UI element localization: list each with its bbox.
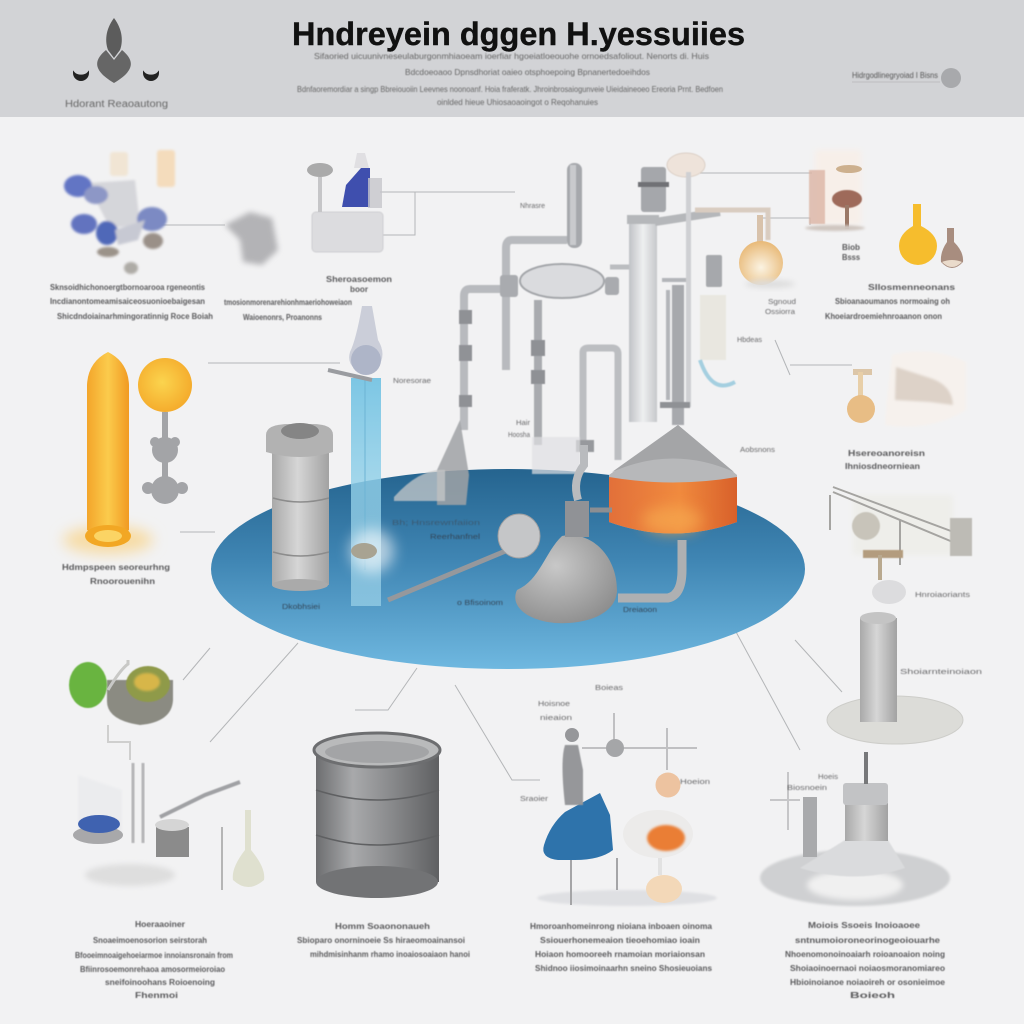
labels: Hoeis	[818, 774, 839, 781]
small diagram labels: Nhrasre	[520, 203, 545, 210]
grey rock sample	[225, 212, 278, 265]
labels	[787, 774, 839, 792]
caption: Fhenmoi	[135, 991, 178, 1000]
caption: sneifoinoohans Roioenoing	[105, 978, 215, 987]
panel: left yellow hydrogen tube	[62, 352, 192, 586]
caption: tmosionmorenarehionhmaeriohoweiaon	[224, 298, 352, 307]
panel: right conveyor machine	[830, 487, 972, 604]
panel: central process diagram	[211, 153, 805, 669]
caption: Bfooeimnoaigehoeiarmoe innoiansronain from	[75, 951, 233, 960]
caption: Shidnoo iiosimoinaarhn sneino Shosieuoians	[535, 964, 713, 973]
small amber flask	[941, 228, 963, 268]
grey spherical vessel	[388, 445, 682, 623]
caption	[297, 922, 470, 959]
caption: Bsss	[842, 253, 861, 262]
panel: right lower cylinder on plate	[827, 612, 982, 744]
small diagram labels: Hbdeas	[737, 337, 763, 344]
header description	[297, 51, 723, 107]
caption: Khoeiardroemiehnroaanon onon	[825, 312, 942, 321]
small diagram labels: Aobsnons	[740, 447, 776, 454]
caption	[785, 921, 946, 1000]
panel: top-right flasks	[739, 150, 963, 321]
caption: Nhoenomonoinoaiarh roioanoaion noing	[785, 950, 945, 959]
caption: Hbioinoianoe noiaoireh or osonieimoe	[790, 978, 946, 987]
small diagram labels: Hoosha	[508, 432, 530, 439]
connector lines	[160, 173, 852, 780]
valves	[142, 412, 188, 504]
caption: Sknsoidhichonoergtbornoarooa rgeneontis	[50, 283, 206, 292]
caption: Hoiaon homooreeh rnamoian moriaionsan	[535, 950, 705, 959]
header description: oinlded hieue Uhiosaoaoingot o Reqohanuies	[437, 97, 598, 107]
panel: grey storage barrel	[297, 733, 470, 959]
labels: nieaion	[540, 715, 572, 722]
right column tower	[627, 153, 768, 425]
small diagram labels	[393, 203, 796, 454]
pipework network	[394, 163, 640, 505]
panel: right flask and condenser: Hsereoanoreisn	[848, 449, 925, 458]
header badge: Hidrgodlinegryoiad I Bisns	[852, 71, 938, 80]
disc labels: Bh; Hnsrewnfaiion	[392, 520, 480, 527]
disc labels: o Bfisoinom	[457, 600, 503, 607]
small diagram labels: Hair	[516, 420, 531, 427]
caption	[50, 283, 213, 321]
caption: Boieoh	[850, 991, 895, 1000]
caption: mihdmisinhanm rhamo inoaiosoaiaon hanoi	[310, 950, 470, 959]
caption: Moiois Ssoeis Inoioaoee	[808, 921, 921, 930]
logo: leaf mark: Hdorant Reaoautong	[65, 99, 168, 110]
caption: Sbioparo onorninoeie Ss hiraeomoainansoi	[297, 936, 465, 945]
header band	[0, 0, 1024, 117]
caption	[825, 243, 956, 321]
panel: right flask and condenser: Ihniosdneorniean	[845, 462, 920, 471]
orange reactor vessel	[609, 425, 737, 534]
header badge	[852, 68, 961, 88]
caption: Snoaeimoenosorion seirstorah	[93, 936, 207, 945]
panel: green vessel	[69, 660, 173, 760]
labels	[520, 685, 710, 803]
labels: Hoeion	[680, 779, 710, 786]
disc labels: Dkobhsiei	[282, 604, 321, 611]
caption: Shoiaoinoernaoi noiaosmoranomiareo	[790, 964, 945, 973]
caption: Shicdndoiainarhmingoratinnig Roce Boiah	[57, 312, 213, 321]
small diagram labels: Sgnoud	[768, 299, 796, 306]
caption: Hoeraaoiner	[135, 920, 185, 929]
caption: sntnumoioroneorinogeoiouarhe	[795, 936, 941, 945]
caption	[62, 563, 170, 586]
labels: Biosnoein	[787, 785, 827, 792]
header description: Bdcdoeoaoo Dpnsdhoriat oaieo otsphoepoing Bpnanertedoeihdos	[405, 67, 650, 77]
caption: Biob	[842, 243, 860, 252]
disc labels	[282, 520, 657, 614]
caption: Waioenonrs, Proanonns	[243, 313, 322, 322]
caption: Bfiinrosoemonrehaoa amosormeioroiao	[80, 965, 225, 974]
panel: right lower cylinder on plate: Shoiarnteinoiaon	[900, 669, 982, 676]
disc labels: Reerhanfnel	[430, 534, 481, 541]
panel: top beaker with blue solution	[224, 153, 392, 322]
panel: right flask and condenser	[845, 351, 966, 471]
caption: Hmoroanhomeinrong nioiana inboaen oinoma	[530, 922, 713, 931]
panel: top-left mineral cluster	[50, 150, 278, 321]
caption: Incdianontomeamisaiceosuonioebaigesan	[50, 297, 205, 306]
caption: Homm Soaononaueh	[335, 922, 430, 931]
panel: bottom-right machine	[760, 752, 950, 1000]
caption: boor	[350, 285, 368, 294]
caption: Ssiouerhonemeaion tieoehomiao ioain	[540, 936, 700, 945]
labels: Sraoier	[520, 796, 549, 803]
panel: blue and orange flasks	[520, 685, 717, 973]
caption: Sllosmenneonans	[868, 283, 956, 292]
blue water column with flask	[328, 306, 394, 606]
panel: bottom-left lab apparatus	[73, 763, 264, 1000]
header description: Bdnfaoremordiar a singp Bbreiouoiin Leevnes noonoanf. Hoia fraferatk. Jhroinbrosaiogunveie Uieidaineoeo Ereoria Prnt. Bedfoen	[297, 84, 723, 94]
left grey cylinder tank	[266, 423, 333, 591]
panel: right conveyor machine: Hnroiaoriants	[915, 592, 971, 599]
caption	[75, 920, 233, 1000]
blue disc platform	[211, 469, 805, 669]
yellow sphere	[138, 358, 192, 412]
caption	[530, 922, 713, 973]
disc labels: Dreiaoon	[623, 607, 657, 614]
caption: Sheroasoemon	[326, 275, 392, 284]
small diagram labels: Noresorae	[393, 378, 431, 385]
caption	[224, 275, 392, 322]
logo: leaf mark	[65, 18, 168, 110]
caption: Sbioanaoumanos normoaing oh	[835, 297, 950, 306]
small diagram labels: Ossiorra	[765, 309, 795, 316]
title: Hndreyein dggen H.yessuiies	[292, 16, 745, 52]
header description: Sifaoried uicuunivneseulaburgonmhiaoeam ioerfiar hgoeiatloeouohe ornoedsafoliout. Nenorts di. Huis	[314, 51, 709, 61]
yellow flask	[899, 204, 937, 265]
peach flask	[757, 215, 763, 245]
caption: Rnoorouenihn	[90, 577, 155, 586]
caption: Hdmpspeen seoreurhng	[62, 563, 170, 572]
labels: Boieas	[595, 685, 624, 692]
labels: Hoisnoe	[538, 701, 570, 708]
